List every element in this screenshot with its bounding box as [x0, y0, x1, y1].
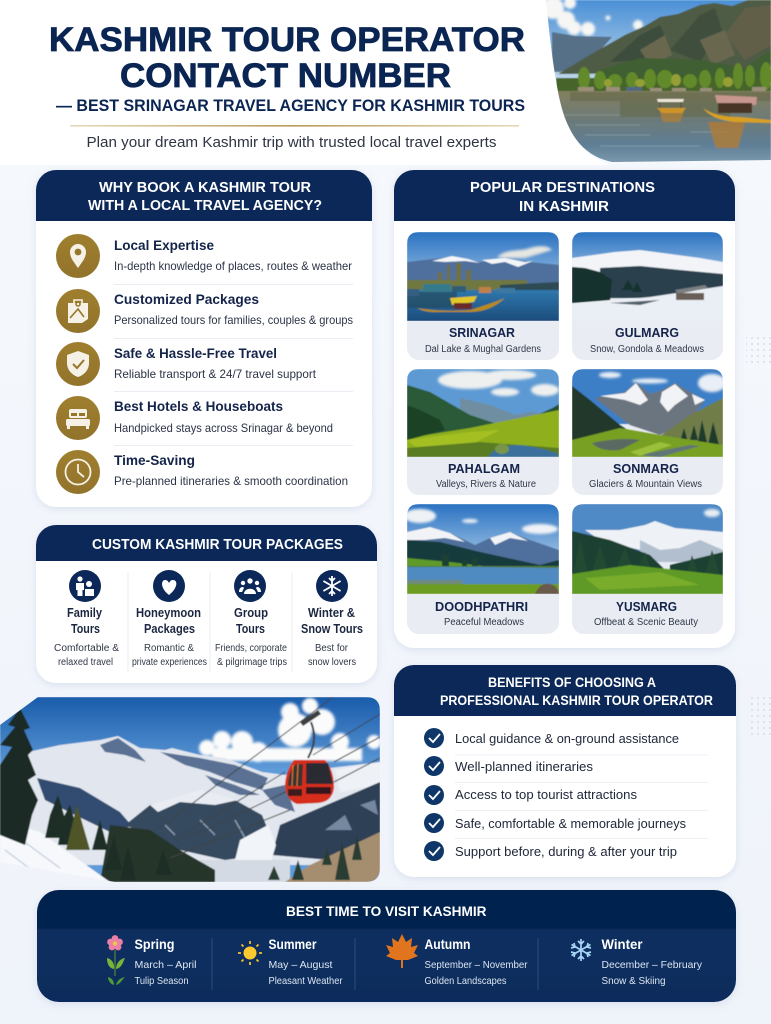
panel header: POPULAR DESTINATIONS — [470, 180, 655, 196]
panel header — [36, 525, 377, 561]
panel header: WITH A LOCAL TRAVEL AGENCY? — [88, 198, 322, 214]
season: spring — [107, 935, 196, 987]
panel header — [36, 170, 372, 221]
season: spring: March – April — [134, 959, 196, 971]
benefit: itineraries: Well-planned itineraries — [455, 759, 594, 774]
package: winter and snow: Best for — [315, 643, 349, 654]
season: winter — [571, 936, 703, 987]
benefit: itineraries — [424, 756, 594, 776]
package: family tours: Family — [67, 606, 102, 620]
package: winter and snow: snow lovers — [308, 657, 356, 668]
panel header — [394, 665, 736, 716]
package: family tours: Comfortable & — [54, 643, 119, 654]
benefit: journeys — [424, 813, 686, 833]
subtitle: — BEST SRINAGAR TRAVEL AGENCY FOR KASHMIR TOURS — [56, 96, 525, 115]
panel: benefits — [394, 665, 736, 877]
benefit: journeys: Safe, comfortable & memorable journeys — [455, 816, 686, 831]
package: winter and snow: Snow Tours — [301, 622, 363, 636]
package: honeymoon — [132, 570, 207, 668]
title: KASHMIR TOUR OPERATOR — [49, 21, 525, 59]
package: group tours: Tours — [236, 622, 265, 636]
destination: Doodhpathri — [404, 504, 559, 634]
item: safe travel — [56, 342, 317, 386]
destination: Pahalgam: PAHALGAM — [448, 461, 520, 476]
item: hotels and houseboats — [56, 396, 333, 440]
item: time saving — [56, 450, 348, 494]
panel header: BENEFITS OF CHOOSING A — [488, 675, 656, 690]
destination: Pahalgam: Valleys, Rivers & Nature — [436, 479, 536, 490]
season: summer — [238, 936, 343, 987]
destination: Srinagar — [407, 232, 559, 360]
panel: best time to visit — [37, 890, 736, 1002]
title: CONTACT NUMBER — [120, 57, 451, 95]
item: customized packages — [56, 289, 353, 333]
package: group tours: Group — [234, 606, 268, 620]
item: time saving: Time-Saving — [114, 452, 195, 468]
panel header: IN KASHMIR — [519, 199, 610, 215]
package: family tours — [54, 570, 119, 668]
benefit: attractions: Access to top tourist attractions — [455, 787, 637, 802]
item: time saving: Pre-planned itineraries & smooth coordination — [114, 474, 348, 488]
photo: Gulmarg gondola — [0, 697, 381, 882]
panel header: PROFESSIONAL KASHMIR TOUR OPERATOR — [440, 693, 713, 708]
package: honeymoon: Honeymoon — [136, 606, 201, 620]
item: safe travel: Safe & Hassle-Free Travel — [114, 345, 277, 361]
season: autumn: September – November — [424, 959, 528, 971]
package: winter and snow — [301, 570, 363, 668]
package: group tours — [215, 570, 287, 668]
destination: Yusmarg: YUSMARG — [616, 599, 677, 614]
gold divider — [70, 125, 519, 127]
destination: Gulmarg — [572, 232, 723, 360]
panel: why book a local agency — [36, 170, 372, 507]
season: spring: Tulip Season — [134, 975, 189, 987]
destination: Sonmarg — [572, 369, 726, 495]
destination: Sonmarg: Glaciers & Mountain Views — [589, 479, 702, 490]
item: hotels and houseboats: Best Hotels & Houseboats — [114, 398, 283, 414]
item: local expertise: In-depth knowledge of places, routes & weather — [114, 259, 352, 273]
season: summer: Summer — [268, 936, 317, 952]
panel header — [394, 170, 735, 221]
benefit: support — [424, 841, 677, 861]
panel heading: BEST TIME TO VISIT KASHMIR — [286, 904, 487, 919]
season: summer: Pleasant Weather — [268, 975, 343, 987]
package: honeymoon: Romantic & — [144, 643, 194, 654]
panel: custom tour packages — [36, 525, 377, 683]
item: hotels and houseboats: Handpicked stays across Srinagar & beyond — [114, 421, 333, 435]
season: winter: Snow & Skiing — [602, 975, 666, 987]
benefit: support: Support before, during & after your trip — [455, 844, 677, 859]
hero photo: Dal Lake — [540, 0, 771, 163]
destination: Srinagar: SRINAGAR — [449, 325, 516, 340]
destination: Srinagar: Dal Lake & Mughal Gardens — [425, 344, 541, 355]
season: summer: May – August — [268, 959, 333, 971]
panel header: CUSTOM KASHMIR TOUR PACKAGES — [92, 537, 343, 553]
benefit: attractions — [424, 785, 637, 805]
title — [49, 21, 525, 95]
benefit: local guidance — [424, 728, 679, 748]
benefit: local guidance: Local guidance & on-ground assistance — [455, 731, 679, 746]
panel: popular destinations — [394, 170, 735, 648]
destination: Yusmarg — [572, 504, 723, 634]
package: honeymoon: Packages — [144, 622, 195, 636]
season: autumn: Autumn — [424, 936, 470, 952]
item: customized packages: Personalized tours for families, couples & groups — [114, 313, 353, 327]
destination: Yusmarg: Offbeat & Scenic Beauty — [594, 617, 698, 628]
item: local expertise: Local Expertise — [114, 237, 214, 253]
season: winter: December – February — [602, 959, 703, 971]
package: winter and snow: Winter & — [308, 606, 355, 620]
package: family tours: Tours — [71, 622, 100, 636]
season: spring: Spring — [134, 936, 174, 952]
package: family tours: relaxed travel — [58, 657, 113, 668]
package: group tours: Friends, corporate — [215, 643, 287, 654]
item: local expertise — [56, 234, 352, 278]
package: honeymoon: private experiences — [132, 657, 207, 668]
season: winter: Winter — [602, 936, 643, 952]
destination: Doodhpathri: Peaceful Meadows — [444, 617, 524, 628]
panel header: WHY BOOK A KASHMIR TOUR — [99, 180, 312, 196]
tagline: Plan your dream Kashmir trip with trusted local travel experts — [86, 134, 497, 151]
item: safe travel: Reliable transport & 24/7 travel support — [114, 367, 317, 381]
destination: Sonmarg: SONMARG — [613, 461, 679, 476]
package: group tours: & pilgrimage trips — [217, 657, 287, 668]
destination: Gulmarg: GULMARG — [615, 325, 679, 340]
destination: Doodhpathri: DOODHPATHRI — [435, 599, 528, 614]
season: autumn — [386, 934, 528, 987]
destination: Gulmarg: Snow, Gondola & Meadows — [590, 344, 704, 355]
destination: Pahalgam — [407, 369, 559, 495]
item: customized packages: Customized Packages — [114, 291, 259, 307]
season: autumn: Golden Landscapes — [424, 975, 506, 987]
